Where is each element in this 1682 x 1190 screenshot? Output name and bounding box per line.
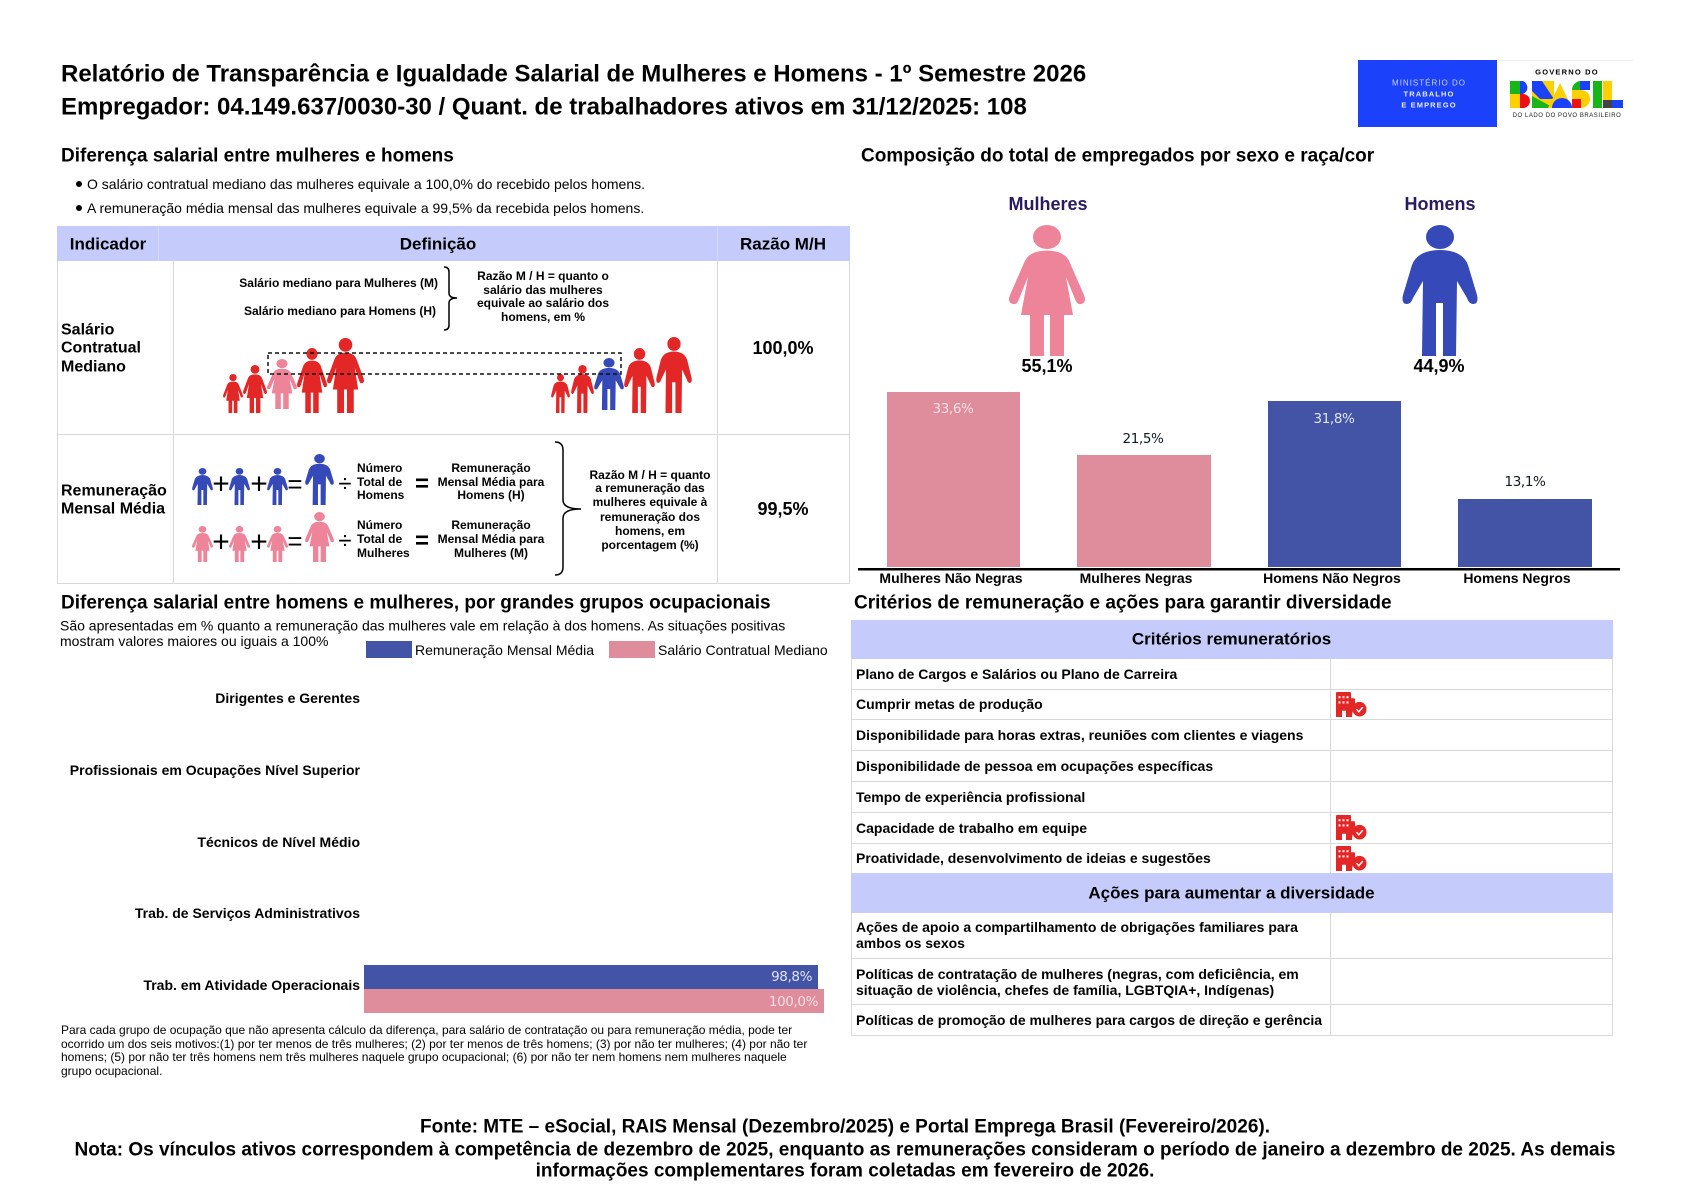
text block: chart description: São apresentadas em % quanto a remuneração das mulheres vale em relação à dos homens. As situações positivas (60, 618, 785, 634)
actions rows: ambos os sexos (856, 935, 965, 951)
text block: footnote: homens; (5) por não ter três homens nem três mulheres naquele grupo ocupacional; (6) por não ter nem homens nem mulheres naquele (61, 1050, 787, 1064)
table header (57, 226, 850, 261)
definition: salário mediano formula: equivale ao salário dos (477, 296, 609, 310)
heading: critérios: Critérios de remuneração e ações para garantir diversidade (854, 592, 1392, 614)
definition: razão remuneração (555, 442, 711, 575)
criteria header: Critérios remuneratórios (1132, 630, 1331, 648)
title (61, 60, 1086, 120)
text block: summary bullets: A remuneração média mensal das mulheres equivale a 99,5% da recebida pelos homens. (87, 200, 644, 216)
definition: razão remuneração: remuneração dos (600, 510, 700, 524)
footer: source and note: informações complementares foram coletadas em fevereiro de 2026. (536, 1160, 1154, 1182)
row label: remuneração mensal média: Remuneração (61, 482, 167, 500)
formula: men average: + (212, 468, 230, 500)
row label: remuneração mensal média (61, 482, 167, 518)
definition: salário mediano formula (239, 267, 609, 330)
actions rows: Políticas de contratação de mulheres (negras, com deficiência, em (856, 966, 1299, 982)
formula: women average: Mulheres (M) (454, 546, 528, 560)
criteria rows: Disponibilidade para horas extras, reuniões com clientes e viagens (856, 727, 1304, 743)
panel: indicator table (57, 226, 850, 584)
criteria rows: Plano de Cargos e Salários ou Plano de Carreira (856, 666, 1178, 682)
panel: women share: 55,1% (1021, 356, 1073, 376)
icon: women median group (223, 338, 364, 413)
bar chart: composition by sex and race: 31,8% (1314, 411, 1355, 427)
row label: salário contratual mediano: Contratual (61, 340, 141, 356)
formula: men average: Remuneração (451, 461, 531, 475)
icon: company check (1336, 846, 1366, 871)
table header: Razão M/H (740, 234, 826, 254)
actions rows: Políticas de promoção de mulheres para cargos de direção e gerência (856, 1012, 1322, 1028)
actions rows (856, 919, 1322, 1028)
criteria rows: Capacidade de trabalho em equipe (856, 820, 1087, 836)
criteria rows: Cumprir metas de produção (856, 696, 1043, 712)
icon: company check (1336, 815, 1366, 840)
row label: remuneração mensal média: Mensal Média (61, 500, 165, 518)
formula: women average: = (415, 528, 429, 554)
formula: men average (192, 454, 545, 505)
definition: razão remuneração: homens, em (615, 524, 685, 538)
row label: salário contratual mediano: Mediano (61, 358, 126, 376)
footer: source and note (75, 1116, 1615, 1182)
formula: men average: Homens (357, 488, 405, 502)
bar chart: occupational groups: Profissionais em Ocupações Nível Superior (70, 762, 361, 778)
text block: summary bullets (76, 176, 645, 216)
text block: summary bullets: O salário contratual mediano das mulheres equivale a 100,0% do recebido pelos homens. (87, 176, 645, 192)
bar chart: composition by sex and race: Mulheres Negras (1080, 570, 1193, 586)
heading: composição: Composição do total de empregados por sexo e raça/cor (861, 146, 1375, 166)
formula: women average: Mensal Média para (438, 532, 545, 546)
panel: men share: 44,9% (1413, 356, 1465, 376)
logo: Ministério do Trabalho e Emprego / Governo do Brasil: GOVERNO DO (1535, 68, 1599, 76)
formula: men average: ÷ (338, 470, 352, 498)
table header: Definição (400, 234, 476, 254)
definition: razão remuneração: a remuneração das (595, 481, 705, 495)
logo: Ministério do Trabalho e Emprego / Governo do Brasil: TRABALHO (1404, 90, 1454, 98)
panel: men share: Homens (1404, 194, 1476, 214)
formula: men average: = (415, 470, 429, 498)
formula: women average: Número (357, 518, 402, 532)
definition: razão remuneração: mulheres equivale à (593, 495, 708, 509)
bar chart: composition by sex and race: 33,6% (933, 401, 974, 417)
legend: Remuneração Mensal Média (415, 642, 594, 658)
logo: Ministério do Trabalho e Emprego / Governo do Brasil: E EMPREGO (1401, 100, 1457, 110)
value: salário contratual mediano: 100,0% (752, 338, 814, 358)
definition: salário mediano formula: homens, em % (501, 310, 585, 324)
row label: salário contratual mediano: Salário (61, 322, 115, 338)
panel: men share (1402, 194, 1478, 376)
definition: salário mediano formula: Salário mediano para Homens (H) (244, 304, 436, 318)
actions rows: Ações de apoio a compartilhamento de obrigações familiares para (856, 919, 1298, 935)
value: remuneração mensal média: 99,5% (757, 499, 809, 519)
bar chart: occupational groups (70, 690, 824, 1013)
criteria header (851, 620, 1613, 659)
formula: men average: = (287, 469, 303, 499)
title: Empregador: 04.149.637/0030-30 / Quant. de trabalhadores ativos em 31/12/2025: 108 (61, 94, 1027, 120)
criteria rows (856, 666, 1304, 866)
formula: men average: + (250, 468, 268, 500)
icon: men median group (551, 337, 692, 413)
panel: women share: Mulheres (1008, 194, 1088, 214)
criteria rows: Disponibilidade de pessoa em ocupações específicas (856, 758, 1213, 774)
logo: Ministério do Trabalho e Emprego / Governo do Brasil: DO LADO DO POVO BRASILEIRO (1513, 113, 1621, 119)
formula: men average: Número (357, 461, 402, 475)
legend (366, 641, 828, 658)
footer: source and note: Fonte: MTE – eSocial, RAIS Mensal (Dezembro/2025) e Portal Emprega Brasil (Fevereiro/2026). (420, 1116, 1270, 1138)
formula: women average: + (212, 526, 230, 558)
criteria rows: Tempo de experiência profissional (856, 789, 1085, 805)
text block: footnote (61, 1023, 807, 1078)
text block: chart description (60, 618, 785, 649)
panel: criteria table (851, 620, 1613, 1036)
bar chart: composition by sex and race: Mulheres Não Negras (879, 570, 1023, 586)
definition: salário mediano formula: Razão M / H = quanto o (477, 269, 609, 283)
bar chart: composition by sex and race: 21,5% (1123, 431, 1164, 447)
table header: Indicador (70, 234, 147, 254)
logo: Ministério do Trabalho e Emprego / Governo do Brasil (1358, 60, 1633, 127)
icon: company check (1336, 692, 1366, 717)
bar chart: composition by sex and race: Homens Negros (1463, 570, 1571, 586)
text block: footnote: ocorrido um dos seis motivos:(1) por ter menos de três mulheres; (2) por ter menos de três homens; (3) por não ter mulheres; (4) por não ter (61, 1037, 807, 1051)
text block: chart description: mostram valores maiores ou iguais a 100% (60, 633, 328, 649)
text block: footnote: grupo ocupacional. (61, 1064, 162, 1078)
panel: women share (1008, 194, 1088, 376)
heading: diferença por grupos ocupacionais: Diferença salarial entre homens e mulheres, por grandes grupos ocupacionais (61, 592, 771, 614)
definition: razão remuneração: Razão M / H = quanto (589, 468, 711, 482)
formula: women average: + (250, 526, 268, 558)
text block: footnote: Para cada grupo de ocupação que não apresenta cálculo da diferença, para salário de contratação ou para remuneração média, pode ter (61, 1023, 792, 1037)
bar chart: composition by sex and race: 13,1% (1505, 474, 1546, 490)
actions header (851, 873, 1613, 913)
bar chart: occupational groups: 100,0% (769, 994, 819, 1010)
formula: women average: = (287, 526, 303, 556)
formula: women average (192, 512, 545, 562)
heading: diferença salarial: Diferença salarial entre mulheres e homens (61, 146, 454, 166)
bar chart: occupational groups: Dirigentes e Gerentes (215, 690, 360, 706)
legend: Salário Contratual Mediano (658, 642, 828, 658)
bar chart: occupational groups: Técnicos de Nível Médio (197, 834, 360, 850)
bar chart: occupational groups: Trab. de Serviços Administrativos (135, 905, 360, 921)
definition: salário mediano formula: salário das mulheres (483, 283, 603, 297)
actions header: Ações para aumentar a diversidade (1088, 884, 1375, 902)
actions rows: situação de violência, chefes de família, LGBTQIA+, Indígenas) (856, 982, 1274, 998)
title: Relatório de Transparência e Igualdade Salarial de Mulheres e Homens - 1º Semestre 2026 (61, 60, 1086, 88)
formula: women average: Remuneração (451, 518, 531, 532)
logo: Ministério do Trabalho e Emprego / Governo do Brasil: MINISTÉRIO DO (1392, 78, 1466, 88)
formula: men average: Total de (357, 475, 402, 489)
formula: men average: Mensal Média para (438, 475, 545, 489)
formula: women average: Mulheres (357, 546, 410, 560)
bar chart: occupational groups: 98,8% (771, 969, 813, 985)
criteria rows: Proatividade, desenvolvimento de ideias e sugestões (856, 850, 1211, 866)
bar chart: occupational groups: Trab. em Atividade Operacionais (143, 977, 360, 993)
bar chart: composition by sex and race (858, 392, 1620, 586)
formula: men average: Homens (H) (457, 488, 525, 502)
footer: source and note: Nota: Os vínculos ativos correspondem à competência de dezembro de 2025, enquanto as remunerações consideram o período de janeiro a dezembro de 2025. As demais (75, 1140, 1615, 1160)
formula: women average: ÷ (338, 528, 352, 554)
row label: salário contratual mediano (61, 322, 141, 376)
definition: razão remuneração: porcentagem (%) (601, 538, 699, 552)
bar chart: composition by sex and race: Homens Não Negros (1263, 570, 1401, 586)
definition: salário mediano formula: Salário mediano para Mulheres (M) (239, 276, 438, 290)
formula: women average: Total de (357, 532, 402, 546)
